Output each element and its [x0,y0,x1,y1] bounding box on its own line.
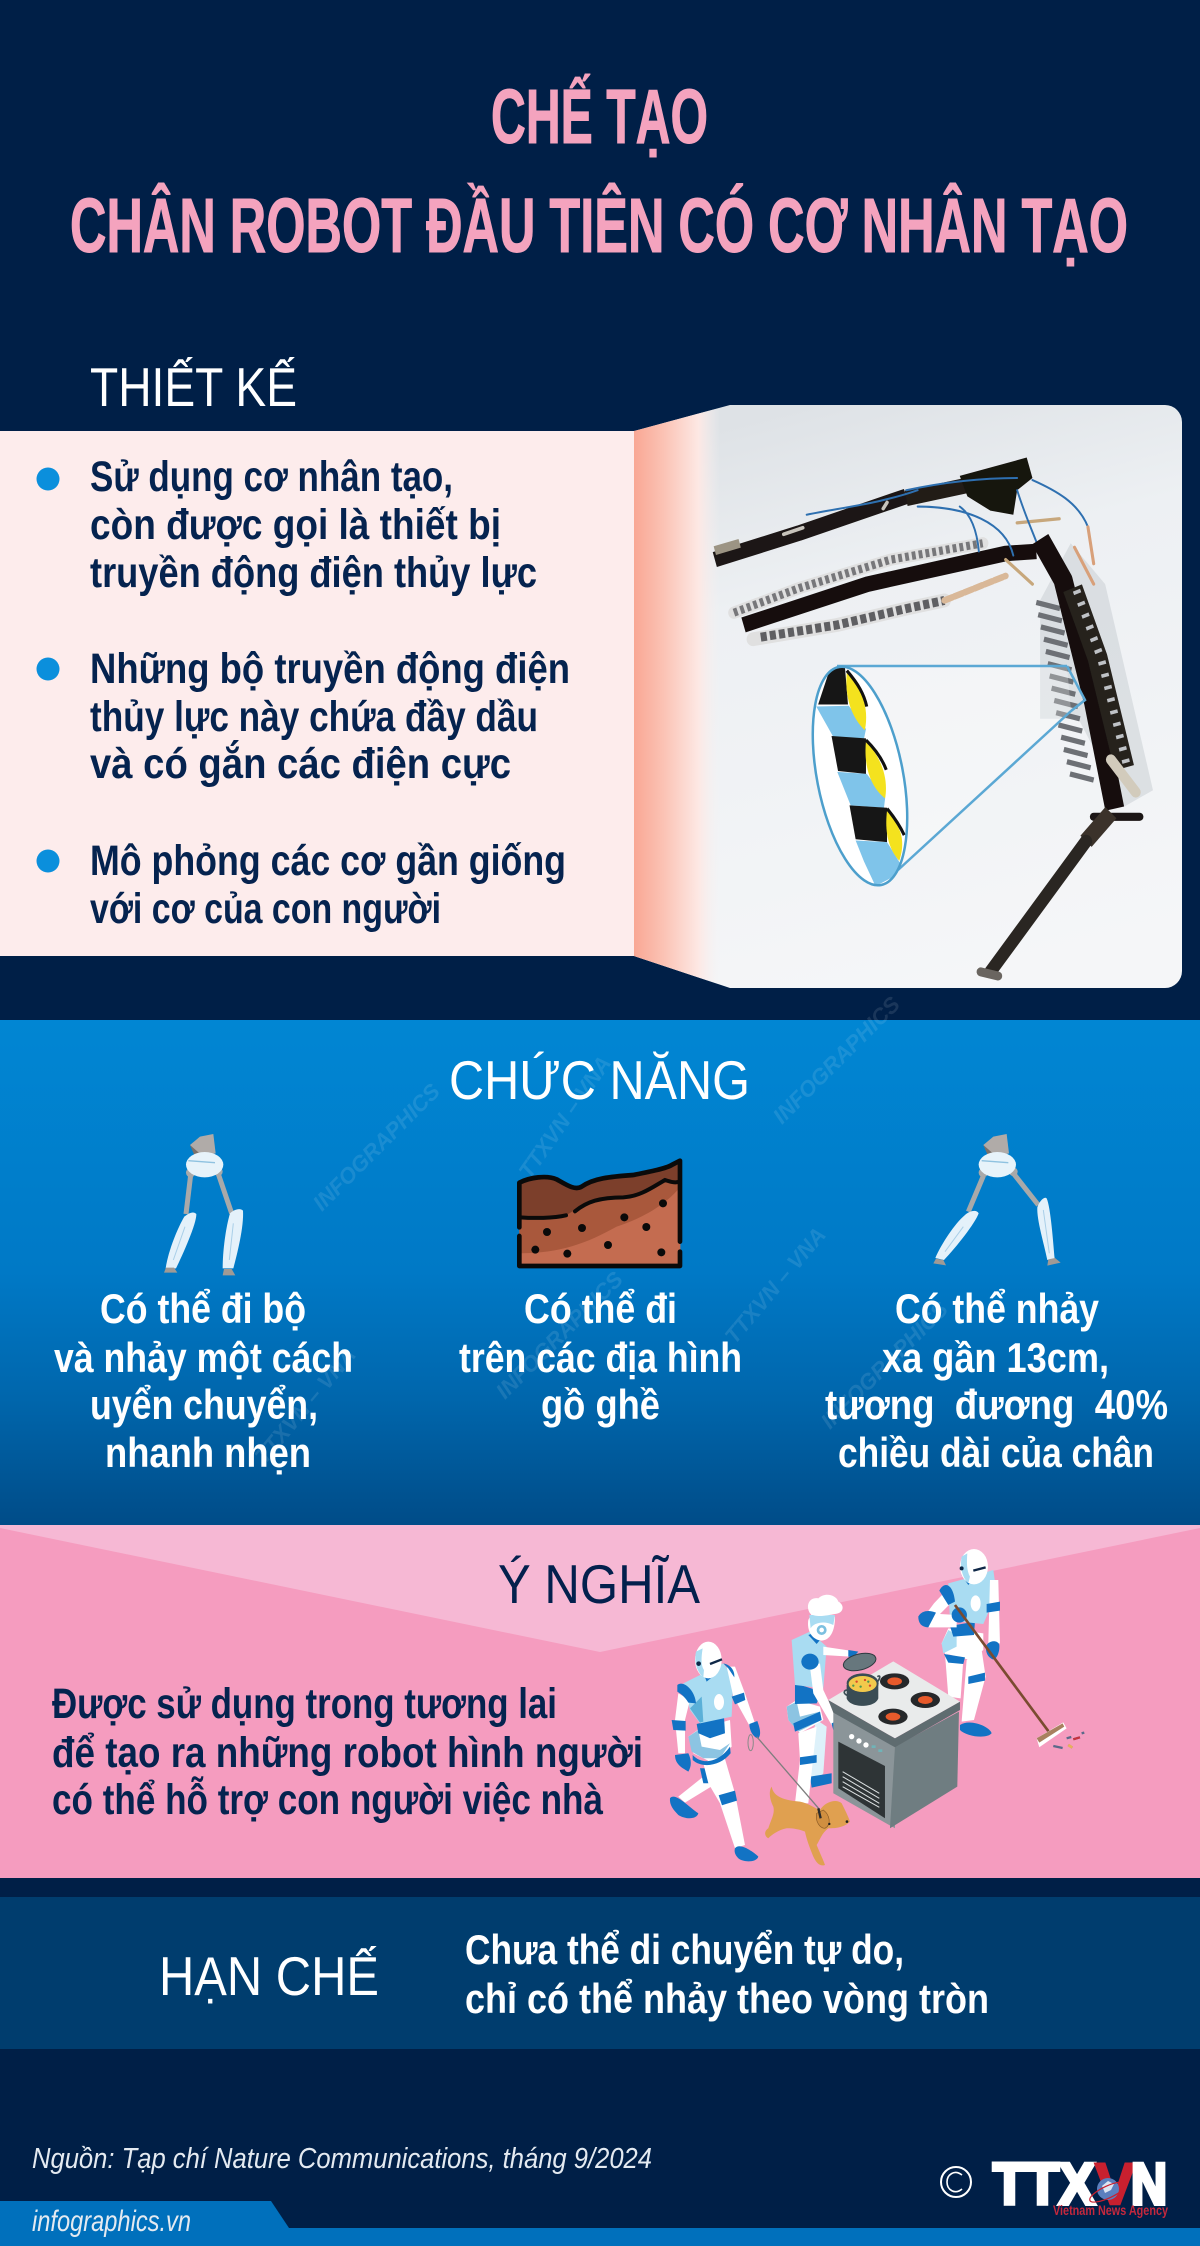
title [70,73,1128,269]
title: CHẾ TẠO [491,73,708,160]
watermarks: TTXVN – VNA [720,1223,831,1348]
watermarks: INFOGRAPHICS [491,1266,628,1404]
logo: TTXVN: Vietnam News Agency [1053,2202,1168,2218]
spine [1040,539,1115,809]
bullet 2 [36,645,570,788]
footer bar with site tab: infographics.vn [32,2205,191,2238]
text: terrain [459,1285,742,1428]
logo: TTXVN: N [1131,2152,1167,2217]
panel: ý nghĩa [0,1525,1200,1878]
panel: thiết kế [0,431,634,956]
text: limitation [465,1926,989,2022]
bullet 3: Mô phỏng các cơ gần giống [90,837,566,885]
text: walking: và nhảy một cách [54,1334,353,1381]
robot leg hardware [715,458,1153,976]
bullet 2: thủy lực này chứa đầy dầu [90,693,538,741]
text: walking [54,1285,353,1476]
text: future use: có thể hỗ trợ con người việc nhà [52,1775,604,1824]
blue background [0,1020,1200,1525]
text: limitation: chỉ có thể nhảy theo vòng tròn [465,1975,989,2022]
bullet 1 [36,453,537,597]
text: terrain: gồ ghề [541,1381,660,1428]
text: jumping: xa gần 13cm, [882,1334,1109,1381]
bullet 3: với cơ của con người [90,885,441,933]
watermarks: INFOGRAPHICS [768,991,905,1129]
robot chef [787,1595,858,1803]
bullet 2: Những bộ truyền động điện [90,645,570,693]
robot with broom [918,1549,1084,1748]
illustration: household robots [670,1549,1084,1865]
heading: ý nghĩa: Ý NGHĨA [498,1553,700,1615]
text: jumping [825,1285,1168,1476]
globe [1087,2178,1129,2206]
bullet 2: và có gắn các điện cực [90,739,511,788]
text: walking: uyển chuyển, [90,1381,318,1428]
panel: hạn chế [0,1897,1200,2049]
watermarks: TTXVN – VNA [250,1343,361,1468]
text: terrain: trên các địa hình [459,1334,742,1381]
watermarks: INFOGRAPHICS [816,1296,953,1434]
heading: hạn chế: HẠN CHẾ [159,1945,379,2007]
text: limitation: Chưa thể di chuyển tự do, [465,1926,904,1973]
text: future use: Được sử dụng trong tương lai [52,1680,557,1728]
band background [0,1897,1200,2049]
text: future use [52,1680,643,1824]
dog and leash [748,1735,850,1865]
photo: robot leg [634,405,1182,988]
pink background [0,1525,1200,1878]
icon: walking robot legs [164,1134,243,1275]
bullet 1: Sử dụng cơ nhân tạo, [90,453,453,501]
watermarks: INFOGRAPHICS [308,1078,445,1216]
text: jumping: Có thể nhảy [895,1285,1100,1332]
text panel background [0,431,634,956]
lower shin [1094,807,1140,827]
logo: TTXVN [941,2152,1168,2218]
source note: Nguồn: Tạp chí Nature Communications, tháng 9/2024 [32,2143,652,2175]
logo: TTXVN: TTX [993,2152,1095,2217]
heading: chức năng: CHỨC NĂNG [449,1049,750,1111]
text: walking: Có thể đi bộ [100,1285,306,1332]
copyright symbol [941,2167,971,2197]
text: terrain: Có thể đi [524,1285,677,1332]
logo: TTXVN: V [1095,2152,1135,2217]
watermarks: TTXVN – VNA [514,1051,616,1183]
zoom cone: muscle detail [797,659,1085,893]
light chevron [0,1525,1200,1652]
bullet 1: còn được gọi là thiết bị [90,501,501,549]
watermarks [250,991,953,1468]
icon: rough terrain [519,1161,681,1266]
heading: thiết kế: THIẾT KẾ [90,356,297,418]
bullet 3 [36,837,566,933]
connector flare [634,405,730,988]
text: walking: nhanh nhẹn [105,1429,311,1476]
stove [828,1650,960,1828]
photo background [634,405,1182,988]
footer bar with site tab [0,2201,1200,2246]
icon: jumping robot legs [933,1134,1061,1266]
ribs [1036,602,1094,780]
bullet 1: truyền động điện thủy lực [90,549,537,597]
robot walking dog [670,1642,760,1861]
panel: chức năng [0,991,1200,1525]
text: future use: để tạo ra những robot hình người [52,1729,643,1777]
